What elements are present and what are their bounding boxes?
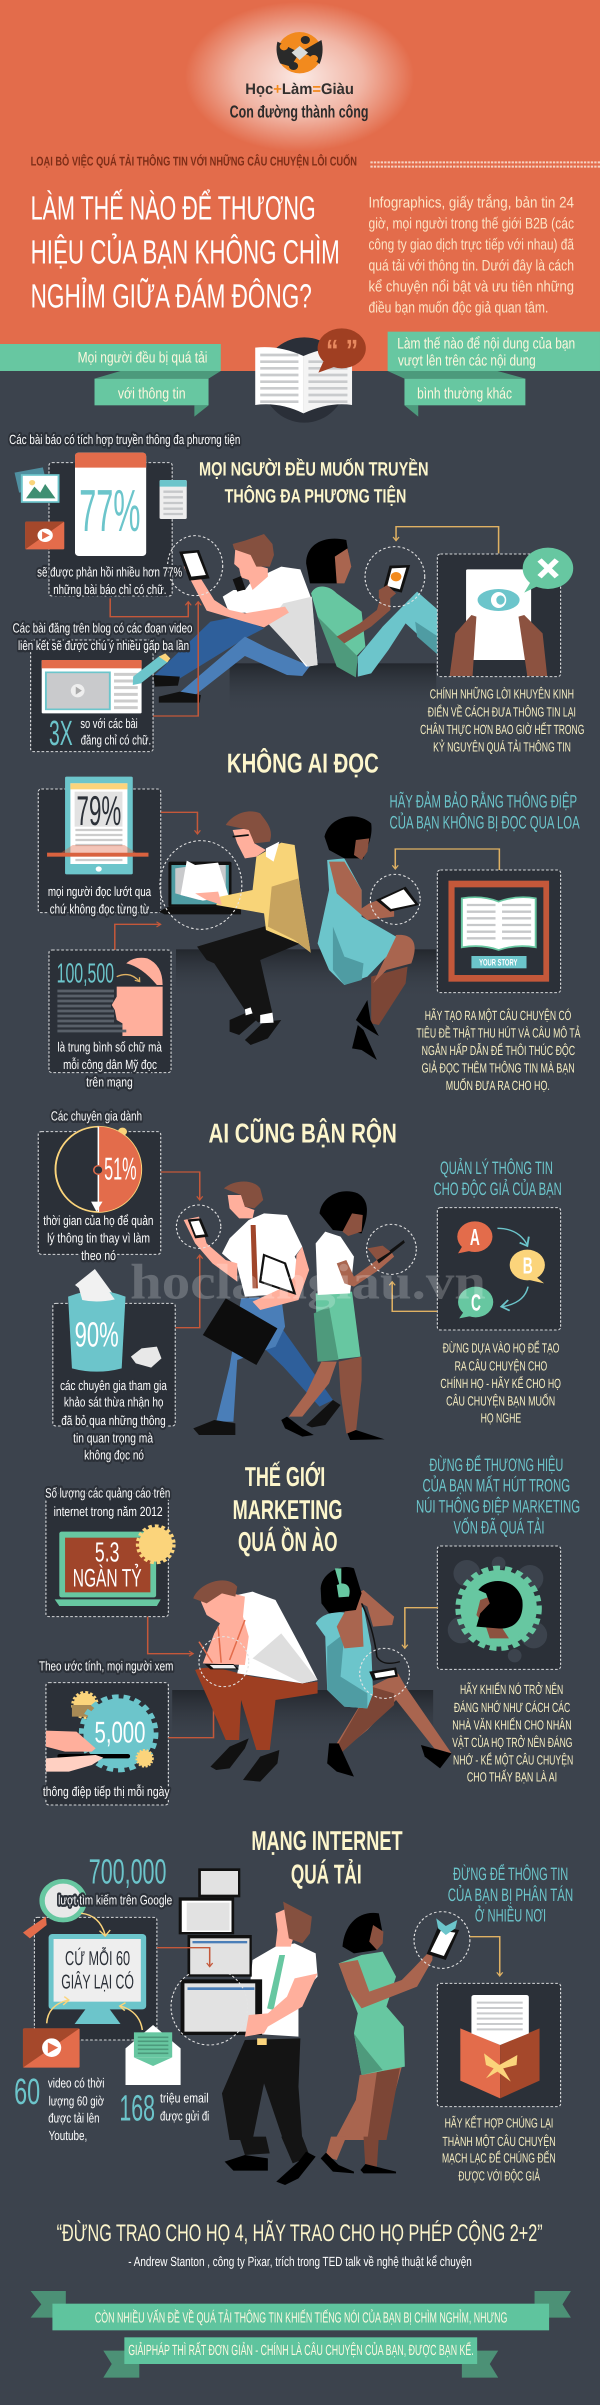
panel: 5,000 messages: 5,000 [95,1716,145,1749]
arrow [470,1937,500,1976]
stat text: ads count: Số lượng các quảng cáo trên [45,1486,170,1501]
panel: 5,000 messages [46,1683,168,1805]
panel: 3X video: đăng chỉ có chữ. [81,733,151,748]
stat text: feedback [37,565,182,597]
figure: woman with phone [335,1913,459,2140]
panel: 77 percent: 77% [79,477,140,544]
stat: 60 videos [14,2071,104,2143]
panel: 3X video: so với các bài [80,716,138,731]
background: orange header [0,0,600,372]
section: nobody reads [38,748,581,1093]
panel: 51 percent stopwatch [38,1127,161,1254]
stat: 700,000: 700,000 [89,1852,166,1891]
section: header [0,2,600,423]
stat text: experts admit: các chuyên gia tham gia [60,1378,167,1393]
floor shadow [230,663,436,713]
stat text: blog video: Các bài đăng trên blog có các đoạn video [13,621,192,636]
banner: second line [103,2337,498,2378]
stat text: experts time [43,1109,153,1263]
figure: seated man with tablet [153,534,318,703]
windows stack [179,1868,262,2035]
advice text [420,687,584,755]
figure: hunched man [193,1580,318,1782]
stat text: experts admit: đã bỏ qua những thông [61,1413,166,1428]
heading: QUÁ TẢI [291,1859,362,1889]
icon: video [25,522,64,549]
heading: AI CŨNG BẬN RỘN [209,1118,397,1148]
panel: eye document [437,548,573,677]
advice text: HỌ NGHE [481,1411,521,1426]
stat: 60 videos: 60 [14,2071,40,2112]
panel: 100,500 words [49,950,171,1073]
panel: A B C: B [523,1252,533,1278]
stat text: messages [39,1659,173,1799]
panel: 77 percent [49,453,187,596]
panel: 5.3 trillion ads: 5.3 [95,1537,119,1568]
panel: A B C: A [470,1224,480,1250]
dashed circles [171,1912,470,2045]
stat text: 77 percent: Các bài báo có tích hợp truyền thông đa phương tiện [9,432,240,447]
man's arm [245,1973,318,2037]
banner: first line [31,2291,571,2330]
figure: man reading laptop [159,811,311,1045]
advice text [442,2134,556,2184]
figure: walking man with briefcase [184,1181,341,1435]
icon: envelope [126,2025,181,2085]
ribbon: left [0,344,221,417]
subheading [448,1864,573,1926]
icon: video [23,2028,80,2068]
stat text: words [57,1040,162,1090]
heading [233,1461,342,1557]
subheading [416,1455,580,1537]
stat text: skim: chứ không đọc từng từ [50,902,149,916]
stat text: experts admit: tin quan trọng mà [73,1431,153,1445]
stat text: experts admit: không đọc nó [84,1448,144,1462]
arrow [148,1617,193,1654]
stat text: ads count: internet trong năm 2012 [54,1504,163,1519]
advice text [440,1341,561,1426]
figure: man carrying windows [222,1902,318,2140]
subheading [390,791,580,832]
figure: walking woman with phone [281,1191,405,1440]
ribbon: left: với thông tin [118,384,186,402]
dashed circles [176,1205,416,1274]
stat text: words: trên mạng [86,1075,133,1090]
stat: 168 emails: được gửi đi [160,2109,209,2124]
panel: every 60 seconds [34,1917,157,2040]
panel: 100,500 words: 100,500 [57,957,114,988]
figure: woman on bench [318,816,419,1060]
ribbon: right: bình thường khác [417,384,512,402]
arrow [168,1690,214,1738]
heading: MẠNG INTERNET [251,1826,403,1856]
heading: THÔNG ĐA PHƯƠNG TIỆN [225,485,406,507]
arrow [161,1172,200,1200]
stat text: experts admit [60,1378,167,1462]
stat text: experts time: lý thông tin thay vì làm [47,1231,150,1245]
stat text: experts time: Các chuyên gia dành [51,1109,142,1124]
stat: 700,000: lượt tìm kiếm trên Google [58,1893,172,1907]
panel: 90 percent bin [53,1269,175,1426]
panel: your story [437,870,561,993]
title: NGHỈM GIỮA ĐÁM ĐÔNG? [31,277,312,315]
stat text: messages: Theo ước tính, mọi người xem [39,1659,173,1674]
advice text [416,1008,581,1093]
figure feet [225,2137,396,2185]
stat: 60 videos: video có thời [48,2076,104,2091]
heading [251,1826,403,1889]
arrow [395,849,499,870]
heading: KHÔNG AI ĐỌC [227,748,379,779]
arrow [115,924,161,950]
stat text: feedback: sẽ được phản hồi nhiều hơn 77% [37,565,182,580]
panel: every 60 seconds: CỨ MỖI 60 [65,1947,130,1969]
icon: open book with speech bubble [255,328,366,423]
section: internet overloaded [14,1826,573,2143]
panel: 3X video: 3X [49,714,73,753]
arrow [405,1608,438,1648]
heading: QUÁ ỒN ÀO [238,1526,337,1557]
panel: A B C: C [471,1289,481,1315]
heading: MARKETING [233,1495,342,1525]
stat: 60 videos: lượng 60 giờ [49,2094,104,2109]
arrow [157,1948,210,1967]
logo tagline: Con đường thành công [230,102,368,122]
stat text: experts time: theo nó [81,1248,116,1263]
stat text: feedback: những bài báo chỉ có chữ. [53,582,166,597]
arrow [392,1282,437,1311]
stat text: blog video: liên kết sẽ được chú ý nhiều gấp ba lần [18,638,189,653]
advice text [452,1682,573,1785]
stat text: blog video [13,621,192,653]
curved arrows [47,1913,142,2030]
figure: woman with headphones [316,1567,452,1777]
kicker: LOẠI BỎ VIỆC QUÁ TẢI THÔNG TIN VỚI NHỮNG CÂU CHUYỆN LÔI CUỐN [31,154,357,169]
dashed circles [160,841,420,929]
section: closing [31,2134,571,2378]
panel: 90 percent bin: 90% [75,1315,119,1354]
dashed circles [168,536,425,607]
ribbon: right [388,332,600,417]
icon: open book with speech bubble: “ ” [326,334,358,367]
stat text: ads count [45,1486,170,1519]
section: everyone wants multimedia [9,432,584,755]
arrow [153,602,198,716]
panel: A B C [437,1208,561,1330]
panel: 5.3 trillion ads [46,1493,173,1617]
stat text: skim: mọi người đọc lướt qua [48,884,151,899]
icon: logo [277,32,323,73]
title: LÀM THẾ NÀO ĐỂ THƯƠNG [31,189,316,227]
stat: 168 emails: 168 [119,2088,155,2129]
panel: head burst [437,1546,561,1669]
logo glow [185,2,414,152]
panel: 3X video [31,640,170,753]
panel: your story: YOUR STORY [479,957,517,968]
arrow [110,598,188,617]
stat text: experts admit: khảo sát thừa nhận họ [64,1395,163,1410]
dashed circles [199,1637,409,1698]
ribbon: right: vượt lên trên các nội dung [398,352,536,369]
panel: 79 percent [38,777,161,913]
stat text: skim [48,884,151,916]
section: everyone is busy [38,1109,562,1462]
ribbon: left: Mọi người đều bị quá tải [78,349,207,366]
icon: magnifier [23,1881,84,1938]
logo wordmark: Học+Làm=Giàu [245,80,354,97]
panel: 5.3 trillion ads: NGÀN TỶ [73,1564,142,1592]
stat: 168 emails: triệu email [160,2091,209,2106]
bench shadow [172,1690,433,1747]
title [31,189,340,315]
panel: gift [437,1983,561,2107]
panel: 51 percent stopwatch: 51% [104,1151,137,1186]
stat text: words: là trung bình số chữ mà [57,1040,162,1055]
arrow [161,812,197,834]
panel: every 60 seconds: GIÂY LẠI CÓ [61,1970,134,1993]
icon: photo [15,467,59,502]
title: HIỆU CỦA BẠN KHÔNG CHÌM [31,233,340,271]
heading [199,458,429,507]
watermark: hoclamgiau.vn [130,1254,486,1310]
arrow [396,527,499,553]
stat text: experts time: thời gian của họ để quản [43,1213,153,1228]
figure: seated woman with tablet [306,539,438,677]
stat text: words: mỗi công dân Mỹ đọc [63,1057,157,1072]
bench shadow [176,949,436,999]
subheading [434,1158,562,1199]
stat: 700,000 [58,1852,172,1907]
stat: 60 videos: Youtube, [49,2128,87,2143]
heading: THẾ GIỚI [245,1461,325,1492]
panel: 79 percent: 79% [77,788,121,834]
arrow [175,1255,200,1328]
stat: 60 videos: được tải lên [48,2111,99,2126]
intro paragraph [368,193,574,316]
heading: MỌI NGƯỜI ĐỀU MUỐN TRUYỀN [199,458,429,480]
section: marketing world too loud [39,1455,580,1805]
stat text: messages: thông điệp tiếp thị mỗi ngày [43,1784,170,1799]
